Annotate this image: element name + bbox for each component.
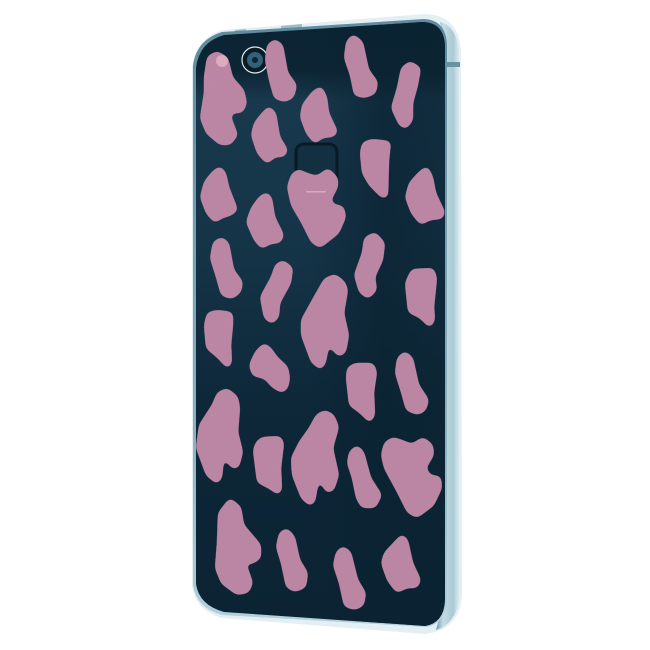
- spot 24: [348, 446, 381, 507]
- spot 5: [345, 35, 377, 97]
- spot 10: [247, 193, 283, 248]
- phone edge rim: [193, 19, 447, 627]
- spot 19: [347, 364, 376, 422]
- spot 7: [361, 140, 390, 197]
- right side of phone frame: [436, 22, 460, 630]
- spot 14: [355, 233, 384, 298]
- spot 23: [292, 411, 338, 505]
- spot 18: [250, 344, 289, 392]
- spot 22: [254, 437, 283, 494]
- spot 26: [216, 499, 260, 594]
- spot 8: [406, 167, 444, 224]
- spot 29: [382, 535, 420, 592]
- spot 17: [205, 311, 232, 368]
- spot 9: [201, 167, 237, 222]
- spot 28: [334, 547, 365, 609]
- spot 2: [266, 40, 296, 101]
- spot 21: [197, 389, 242, 483]
- sensor highlight on spot: [306, 191, 326, 192]
- spot 4: [301, 87, 337, 143]
- fingerprint sensor: [296, 144, 337, 186]
- spot 1: [201, 52, 246, 144]
- flash light: [216, 55, 228, 67]
- spot 27: [277, 529, 307, 591]
- spot 15: [406, 269, 436, 327]
- spot 6: [392, 62, 420, 128]
- spot 25: [382, 438, 441, 517]
- top buttons: [235, 24, 302, 32]
- spot 3: [252, 107, 287, 163]
- phone back panel: [196, 22, 445, 626]
- cow-print spots: [197, 35, 444, 609]
- clear case outer shell: [192, 14, 462, 634]
- spot 13: [261, 261, 292, 323]
- right side shading of back panel: [196, 22, 445, 626]
- spot 11: [288, 169, 345, 247]
- spot 12: [211, 238, 242, 298]
- spot 20: [396, 352, 428, 414]
- camera: [242, 47, 268, 73]
- spot 16: [302, 275, 348, 369]
